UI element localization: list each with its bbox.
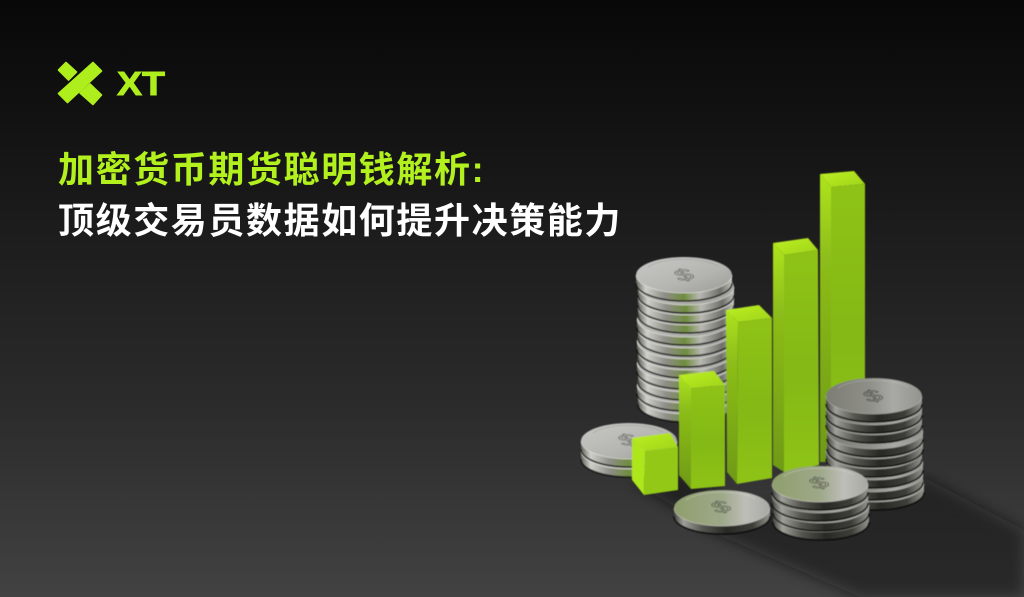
title line 1: 加密货币期货聪明钱解析: bbox=[58, 149, 485, 190]
floor shadow bbox=[630, 470, 1024, 597]
coin stack: tall left bbox=[636, 257, 734, 422]
coin stack: right bbox=[826, 378, 924, 510]
green bar 4 bbox=[773, 238, 819, 472]
single flat coin: $ bbox=[707, 498, 736, 517]
single flat coin bbox=[674, 490, 770, 534]
title bbox=[58, 149, 622, 241]
coin stack: front: $ bbox=[805, 474, 834, 493]
green bar 3 bbox=[726, 305, 772, 484]
green bar 5 bbox=[820, 171, 865, 462]
coin stack: front bbox=[772, 466, 869, 540]
green bar 2 bbox=[679, 371, 725, 489]
title line 2: 顶级交易员数据如何提升决策能力 bbox=[58, 200, 622, 241]
coin stack: small left: $ bbox=[614, 431, 643, 450]
coin stack: right: $ bbox=[859, 387, 888, 406]
logo mark: X bbox=[58, 62, 102, 104]
green bar 1 bbox=[632, 433, 678, 495]
logo wordmark: XT bbox=[117, 65, 165, 102]
coin stack: small left bbox=[581, 423, 677, 477]
coin stack: tall left: $ bbox=[670, 266, 699, 285]
logo bbox=[58, 62, 166, 106]
